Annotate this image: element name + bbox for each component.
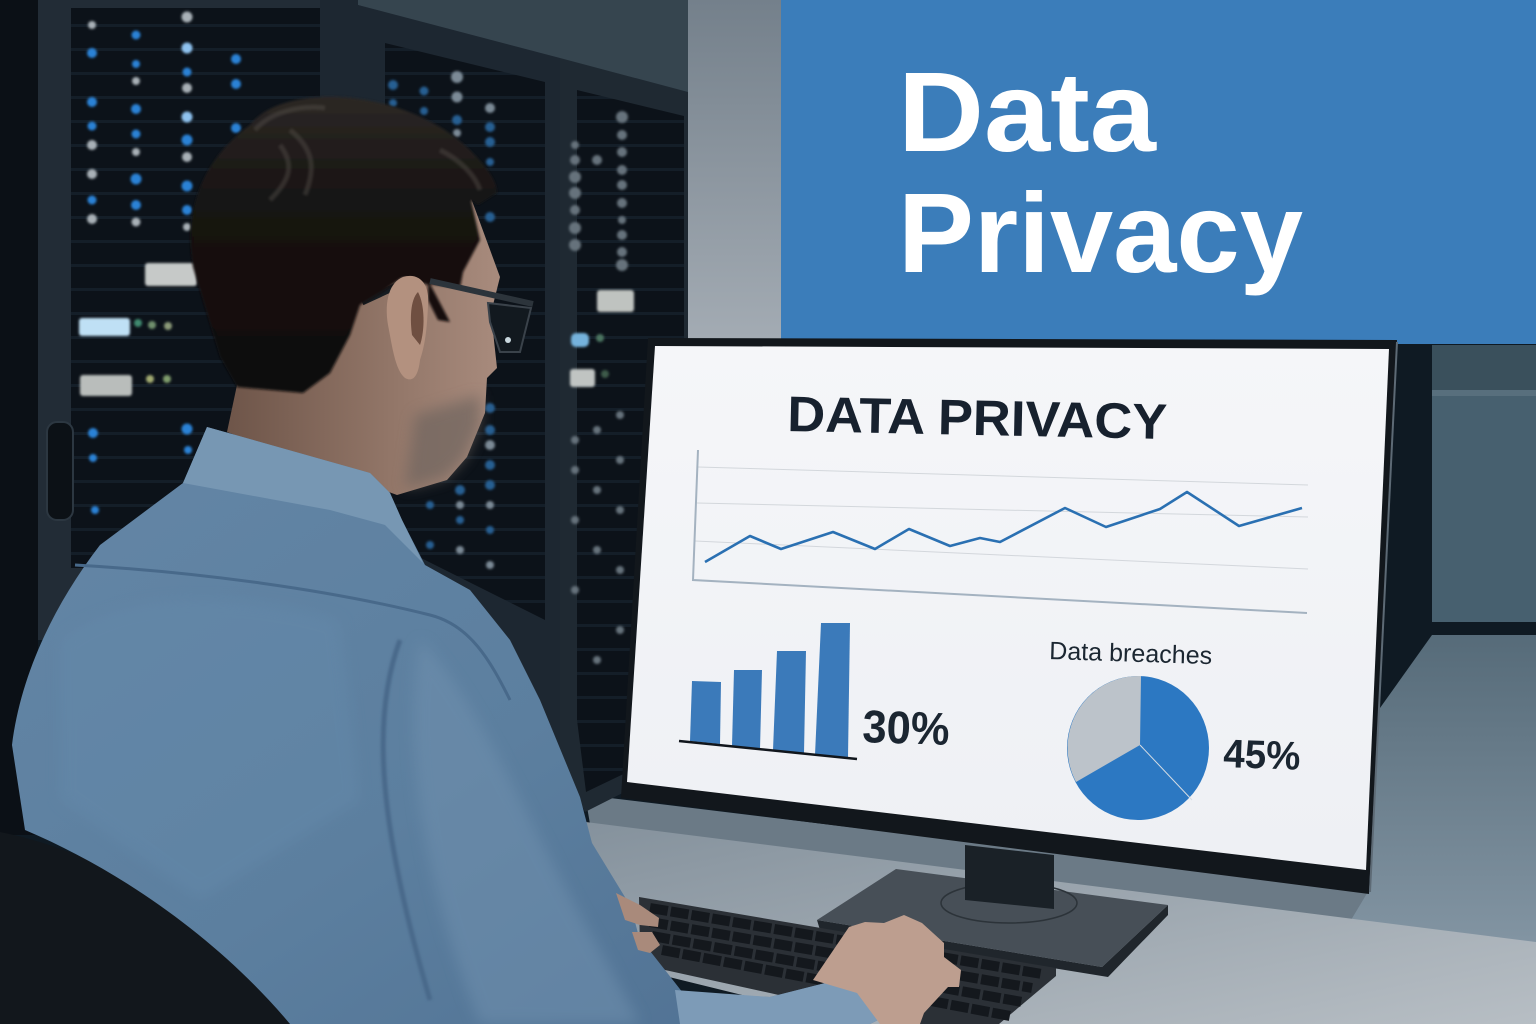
- title: Data: [898, 49, 1157, 175]
- right hand: [813, 915, 961, 1024]
- left finger two: [632, 932, 660, 953]
- stubble: [405, 395, 480, 488]
- desk: [570, 820, 1536, 1024]
- left finger one: [616, 893, 659, 927]
- back shading: [60, 600, 360, 900]
- server racks: [0, 0, 688, 835]
- ceiling: [340, 0, 690, 100]
- shirt: [12, 427, 878, 1024]
- monitor bezel: [621, 338, 1397, 894]
- bar chart value: 30%: [862, 700, 950, 755]
- glasses far temple: [362, 283, 403, 302]
- shoulder seam: [75, 565, 510, 700]
- hair: [191, 97, 497, 393]
- monitor stand and base: [817, 845, 1168, 977]
- floor under monitor: [585, 795, 1369, 930]
- title line two: Privacy: [898, 170, 1303, 296]
- rack labels: [79, 263, 634, 396]
- line chart: [693, 450, 1308, 613]
- bar chart: [679, 623, 857, 759]
- monitor screen: [627, 346, 1389, 870]
- glasses: [430, 281, 533, 352]
- chair: [0, 832, 290, 1024]
- pie chart: [1067, 676, 1209, 820]
- floor: [1345, 635, 1536, 955]
- forearm highlight: [675, 980, 878, 1024]
- monitor: [621, 338, 1397, 894]
- sleeve highlight: [414, 640, 640, 1024]
- rack status lights: [87, 12, 628, 664]
- collar: [183, 427, 423, 563]
- pie chart value: 45%: [1223, 732, 1301, 779]
- screen heading: DATA PRIVACY: [787, 386, 1168, 450]
- inner ear: [411, 292, 424, 345]
- panel: blue title banner: [781, 0, 1536, 344]
- ear: [387, 276, 428, 379]
- person: [12, 97, 961, 1024]
- keyboard: [639, 897, 1056, 1024]
- pie chart label: Data breaches: [1049, 637, 1213, 670]
- door handle: [47, 422, 73, 520]
- head and neck: [227, 198, 500, 495]
- sleeve fold: [383, 640, 430, 1000]
- back room cabinet: [1432, 345, 1536, 622]
- hair highlights: [255, 107, 480, 200]
